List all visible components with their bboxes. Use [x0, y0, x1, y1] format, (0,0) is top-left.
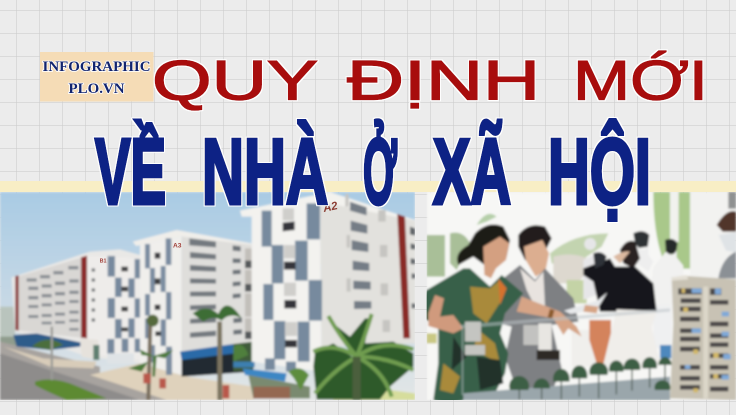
title: VỀ NHÀ Ở XÃ HỘI: XÃ [433, 120, 511, 224]
label: B1: B1 [100, 259, 107, 265]
dark person [620, 241, 640, 268]
block B1 [12, 249, 141, 363]
scale model building [670, 276, 736, 400]
title: VỀ NHÀ Ở XÃ HỘI: HỘI [548, 120, 651, 224]
background people [583, 238, 600, 300]
model base [463, 377, 670, 400]
palm [217, 322, 222, 400]
label: A3: A3 [173, 242, 182, 249]
title: QUY ĐỊNH MỚI: MỚI [573, 48, 708, 111]
title: QUY ĐỊNH MỚI: QUY [152, 48, 318, 111]
photo: apartment blocks [0, 192, 415, 400]
block A3 [133, 230, 252, 247]
title: VỀ NHÀ Ở XÃ HỘI [95, 120, 651, 224]
median [35, 380, 107, 400]
cream band [0, 181, 736, 192]
right man [717, 211, 736, 232]
block A2 [240, 192, 415, 223]
big palm [313, 318, 413, 399]
badge: Infographic PLO.VN [40, 52, 154, 102]
white poster [603, 309, 660, 371]
title: VỀ NHÀ Ở XÃ HỘI: Ở [363, 120, 397, 224]
badge: Infographic PLO.VN: INFOGRAPHIC [42, 59, 150, 75]
man grey suit [518, 225, 552, 263]
paper [564, 292, 607, 314]
title: QUY ĐỊNH MỚI [152, 48, 708, 111]
badge: Infographic PLO.VN: PLO.VN [68, 81, 125, 97]
model trees [509, 357, 672, 390]
title: QUY ĐỊNH MỚI: ĐỊNH [347, 48, 540, 111]
title: VỀ NHÀ Ở XÃ HỘI: VỀ [95, 120, 166, 224]
woman arms [428, 295, 463, 333]
label: A2: A2 [321, 200, 339, 215]
woman [457, 224, 510, 267]
thin tree [146, 323, 152, 400]
title: VỀ NHÀ Ở XÃ HỘI: NHÀ [202, 120, 328, 224]
photo: visitors at housing model [418, 192, 736, 403]
glass case [460, 308, 670, 395]
